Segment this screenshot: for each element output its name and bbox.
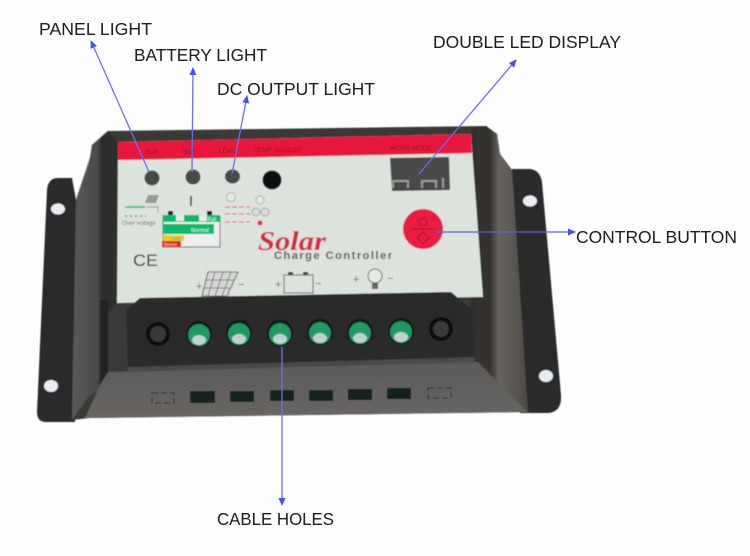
brand text: Solar Charge Controller <box>258 226 393 262</box>
left mounting flange <box>37 178 76 422</box>
label: PANEL LIGHT: PANEL LIGHT <box>39 19 152 39</box>
icon: bulb <box>353 269 393 289</box>
battery status diagram: Normal <box>191 228 209 234</box>
right mounting flange <box>512 169 561 413</box>
faint header labels on device <box>145 145 432 156</box>
battery status diagram <box>122 192 269 247</box>
label: CABLE HOLES: CABLE HOLES <box>217 509 334 529</box>
icon: solar panel: − <box>238 279 244 291</box>
label: BATTERY LIGHT <box>134 45 267 172</box>
battery status diagram: Over voltage <box>122 221 157 227</box>
faint header labels on device: TEMP SENSOR <box>254 147 302 154</box>
solar charge controller device <box>37 126 561 422</box>
label: BATTERY LIGHT: BATTERY LIGHT <box>134 45 267 65</box>
brand text: Solar Charge Controller: Solar <box>258 226 327 256</box>
icon: solar panel <box>196 272 244 296</box>
lower front wall <box>85 362 528 418</box>
icon: solar panel: + <box>196 281 202 293</box>
terminal block <box>126 292 475 371</box>
icon: battery <box>275 272 321 293</box>
body right side shading <box>470 126 528 412</box>
cable holes row <box>152 388 451 403</box>
faint header labels on device: SUN <box>145 149 159 156</box>
label: PANEL LIGHT <box>39 19 152 172</box>
icon: bulb: − <box>387 273 393 285</box>
icon: battery: + <box>275 279 281 291</box>
CE mark: CE <box>133 251 158 270</box>
battery status diagram: Low <box>172 236 181 241</box>
label: CONTROL BUTTON: CONTROL BUTTON <box>576 227 737 247</box>
terminal row <box>146 317 453 347</box>
main body <box>72 126 528 420</box>
indicator holes <box>144 170 240 186</box>
faint header labels on device: WORK MODE <box>390 145 432 152</box>
control button <box>403 209 443 249</box>
battery status diagram: Full <box>208 217 216 223</box>
faint header labels on device: BAT <box>183 149 195 156</box>
face plate <box>117 134 483 303</box>
red header band <box>118 134 472 160</box>
icon: battery: − <box>315 278 321 290</box>
battery status diagram: Derive <box>164 242 178 247</box>
label: DC OUTPUT LIGHT: DC OUTPUT LIGHT <box>217 79 375 99</box>
icon: bulb: + <box>353 274 359 286</box>
label: DOUBLE LED DISPLAY <box>419 32 621 174</box>
label: DOUBLE LED DISPLAY: DOUBLE LED DISPLAY <box>433 32 621 52</box>
mounting holes <box>44 196 553 392</box>
double LED display <box>390 157 450 191</box>
label: DC OUTPUT LIGHT <box>217 79 375 174</box>
body left side shading <box>72 131 118 420</box>
brand text: Solar Charge Controller: Charge Controller <box>274 250 393 262</box>
faint header labels on device: LOAD <box>219 148 237 155</box>
temperature sensor hole <box>262 170 282 190</box>
